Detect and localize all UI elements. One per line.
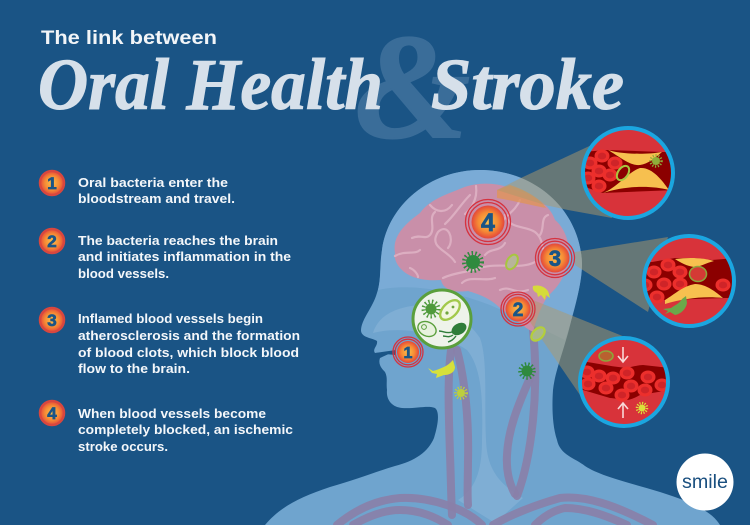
step 3 text: of blood clots, which block blood	[78, 345, 299, 360]
step 4	[40, 401, 293, 454]
smile logo	[676, 454, 734, 510]
step 3	[40, 308, 300, 376]
carotid second	[457, 350, 468, 505]
vessel inset: middle, narrowing artery	[638, 236, 736, 326]
badge 3	[40, 308, 64, 332]
badge 1	[40, 171, 64, 195]
title: oral health: Oral Health	[38, 44, 383, 125]
badge 2: 2	[47, 232, 57, 251]
lower left chest arc	[353, 510, 448, 525]
title ampersand: &	[355, 4, 470, 170]
floating germ: dark virus	[520, 364, 534, 378]
title	[38, 27, 624, 125]
carotid third	[507, 378, 530, 494]
lower plaque	[603, 168, 669, 193]
step 4 text: When blood vessels become	[78, 406, 266, 421]
clot germ	[690, 266, 706, 282]
title: lead line: The link between	[41, 27, 217, 49]
step 4 text	[78, 406, 293, 454]
step 4 text: completely blocked, an ischemic	[78, 422, 293, 437]
magnifier cone: top	[497, 142, 612, 218]
vessel inset: top, blocked artery	[580, 128, 675, 218]
head badge 1	[393, 337, 423, 367]
arrow down	[618, 347, 628, 362]
right chest arcs	[493, 497, 653, 525]
head badge 4: 4	[481, 209, 495, 237]
step 1 text: bloodstream and travel.	[78, 191, 235, 206]
step 2 text: The bacteria reaches the brain	[78, 233, 278, 248]
artery channel	[580, 361, 670, 400]
floating germ: yellow bug	[533, 285, 550, 300]
brain	[395, 184, 569, 332]
red blood cells	[638, 258, 730, 304]
carotid left pair	[449, 350, 452, 515]
floating germ: yellow bacterium	[504, 253, 520, 271]
upper plaque	[675, 258, 714, 267]
artery channel	[644, 258, 736, 300]
inset ring	[644, 236, 734, 326]
step 1 text: Oral bacteria enter the	[78, 175, 228, 190]
ring bacterium	[614, 164, 632, 182]
mouth bacteria circle	[413, 290, 471, 348]
germ: dark tentacled	[439, 320, 469, 342]
inset ring	[583, 128, 673, 218]
badge 4	[40, 401, 64, 425]
step 3 text: flow to the brain.	[78, 361, 190, 376]
mouth line	[375, 350, 396, 355]
head badge 3: 3	[549, 246, 561, 271]
step 1	[40, 171, 235, 206]
magnifier cone: middle	[575, 237, 668, 312]
head badge 1: 1	[404, 345, 413, 362]
orange lit brain area	[497, 185, 546, 208]
floating germ: small yellow virus	[456, 388, 466, 398]
red blood cells	[585, 150, 622, 192]
red blood cells	[580, 366, 670, 402]
step 3 text	[78, 311, 300, 376]
floating germ: oval near neck	[529, 325, 547, 343]
smile logo: smile	[682, 472, 728, 493]
badge 1: 1	[47, 174, 57, 193]
upper skull highlight	[378, 170, 582, 340]
left chest arcs	[337, 498, 482, 525]
badge 4: 4	[47, 404, 57, 423]
floating germ: green virus	[464, 253, 482, 271]
badge 2	[40, 229, 64, 253]
head badge 4	[466, 200, 510, 244]
germ: virus	[424, 302, 438, 316]
title: stroke: Stroke	[431, 44, 624, 125]
step 2 text: blood vessels.	[78, 266, 169, 281]
lower right chest arc	[535, 508, 627, 525]
brain mass	[395, 184, 569, 332]
magnifier cone: bottom	[528, 298, 625, 395]
human head and shoulders silhouette	[265, 170, 720, 525]
step 1 text	[78, 175, 235, 206]
vessel inset: bottom, inflamed artery	[580, 338, 670, 426]
step 4 text: stroke occurs.	[78, 439, 168, 454]
floating germ: yellow creature	[428, 360, 455, 378]
germ top	[599, 351, 613, 361]
inset ring	[580, 338, 668, 426]
germ bottom	[637, 403, 647, 413]
germ: oval bacterium	[437, 297, 463, 323]
head badge 2	[501, 292, 535, 326]
head badge 3	[536, 238, 574, 278]
head badge 2: 2	[513, 300, 523, 321]
green bug	[663, 296, 687, 315]
germ: cell	[415, 319, 439, 339]
step 3 text: atherosclerosis and the formation	[78, 328, 300, 343]
throat and airway	[373, 305, 523, 523]
germ on plaque	[650, 156, 662, 166]
artery channel	[582, 150, 675, 193]
upper plaque	[608, 150, 662, 165]
step 3 text: Inflamed blood vessels begin	[78, 311, 263, 326]
badge 3: 3	[47, 311, 57, 330]
step 2 text	[78, 233, 291, 281]
arrow up	[618, 403, 628, 418]
step 2	[40, 229, 291, 281]
brain folds	[395, 186, 548, 291]
carotid right pair	[517, 330, 535, 496]
blood vessels	[337, 330, 653, 525]
step 2 text: and initiates inflammation in the	[78, 249, 291, 264]
lower plaque	[665, 284, 723, 304]
